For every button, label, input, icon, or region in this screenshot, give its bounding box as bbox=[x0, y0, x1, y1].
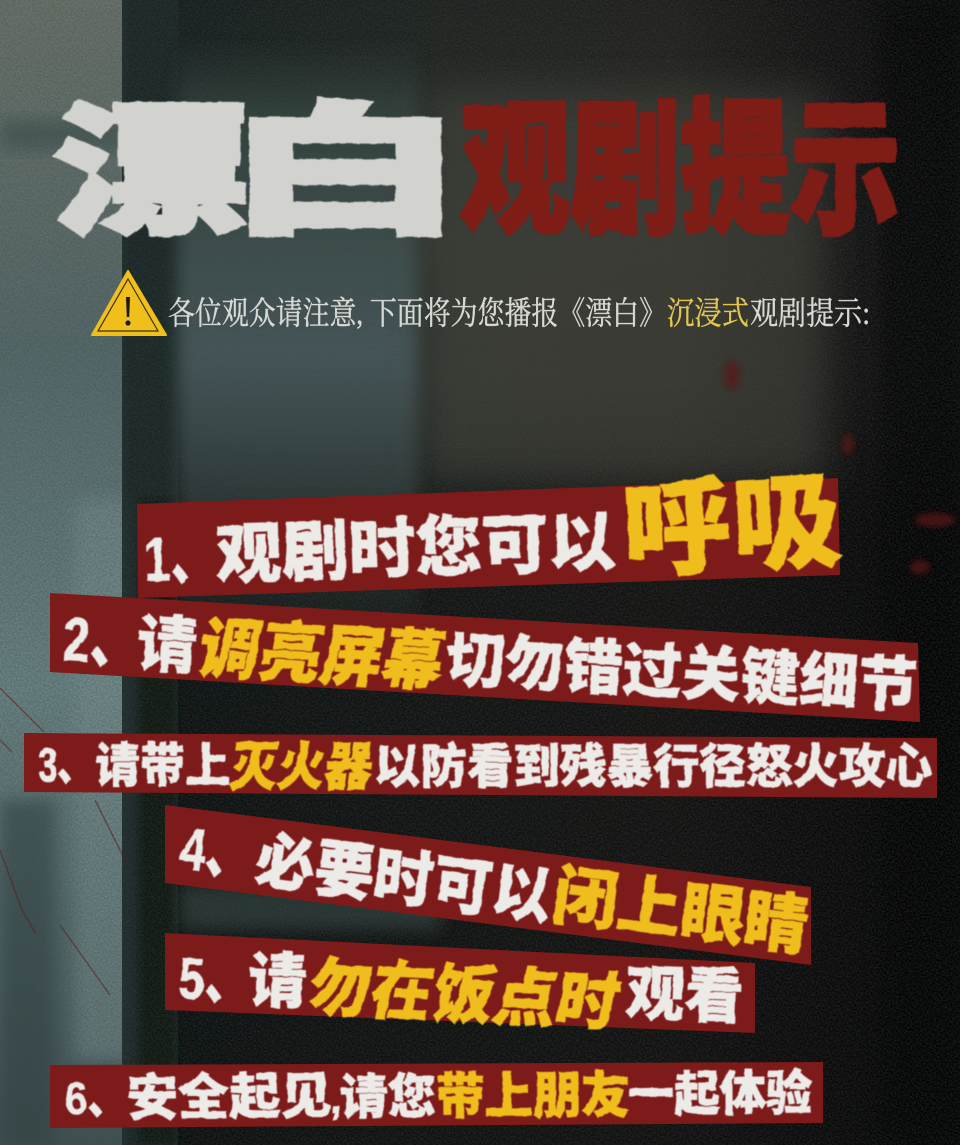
tip banner 2: 调亮屏幕 bbox=[192, 613, 451, 700]
tip banner 5: 5、 bbox=[178, 946, 252, 1014]
intro sentence: 各位观众请注意, 下面将为您播报《漂白》 bbox=[168, 295, 666, 331]
tip banner 3: 请带上 bbox=[95, 739, 230, 792]
tip banner 3: 3、 bbox=[38, 738, 93, 791]
tip banner 4: 闭上眼睛 bbox=[549, 858, 812, 963]
title: 漂白: 漂 bbox=[54, 93, 248, 251]
tip banner 1: 1、 bbox=[143, 524, 217, 595]
tip banner 6: 安全起见 bbox=[127, 1069, 332, 1126]
icon: warning triangle bbox=[92, 271, 166, 335]
tip banner 2: 2、 bbox=[61, 605, 140, 678]
tip banner 6 bbox=[50, 1062, 823, 1128]
tip banner 5: 请 bbox=[248, 947, 308, 1016]
tip banner 3 bbox=[24, 733, 937, 798]
tip banner 5 bbox=[165, 933, 755, 1039]
tip banner 1 bbox=[137, 463, 845, 598]
tip banner 2 bbox=[50, 593, 920, 722]
tip banner 4: 4、 bbox=[176, 814, 256, 890]
tip banner 3: 灭火器 bbox=[226, 739, 376, 797]
tip banner 5: 观看 bbox=[625, 960, 745, 1031]
tip banner 1: 观剧时您可以 bbox=[214, 505, 616, 592]
tip banner 2: 请 bbox=[135, 610, 199, 682]
title: 漂白: 白 bbox=[228, 93, 462, 251]
tip banner 3: 以防看到残暴行径怒火攻心 bbox=[374, 740, 932, 793]
tip banner 6: 请您 bbox=[340, 1071, 436, 1125]
tip banner 4: 必要时可以 bbox=[251, 826, 556, 933]
title: 漂白 bbox=[54, 93, 462, 251]
tip banner 5: 勿在饭点时 bbox=[302, 952, 626, 1039]
tip banner 4 bbox=[165, 805, 812, 965]
tip banner 6: 带上朋友 bbox=[436, 1068, 630, 1125]
intro sentence: 观剧提示: bbox=[750, 295, 870, 331]
tip banner 1: 呼吸 bbox=[619, 463, 845, 592]
tip banner 6: 6、 bbox=[65, 1072, 127, 1124]
tip banner 6: , bbox=[330, 1071, 342, 1123]
intro sentence: 沉浸式 bbox=[667, 295, 749, 331]
tip banner 2: 切勿错过关键细节 bbox=[444, 626, 919, 720]
tip banner 6: 一起体验 bbox=[628, 1068, 812, 1122]
